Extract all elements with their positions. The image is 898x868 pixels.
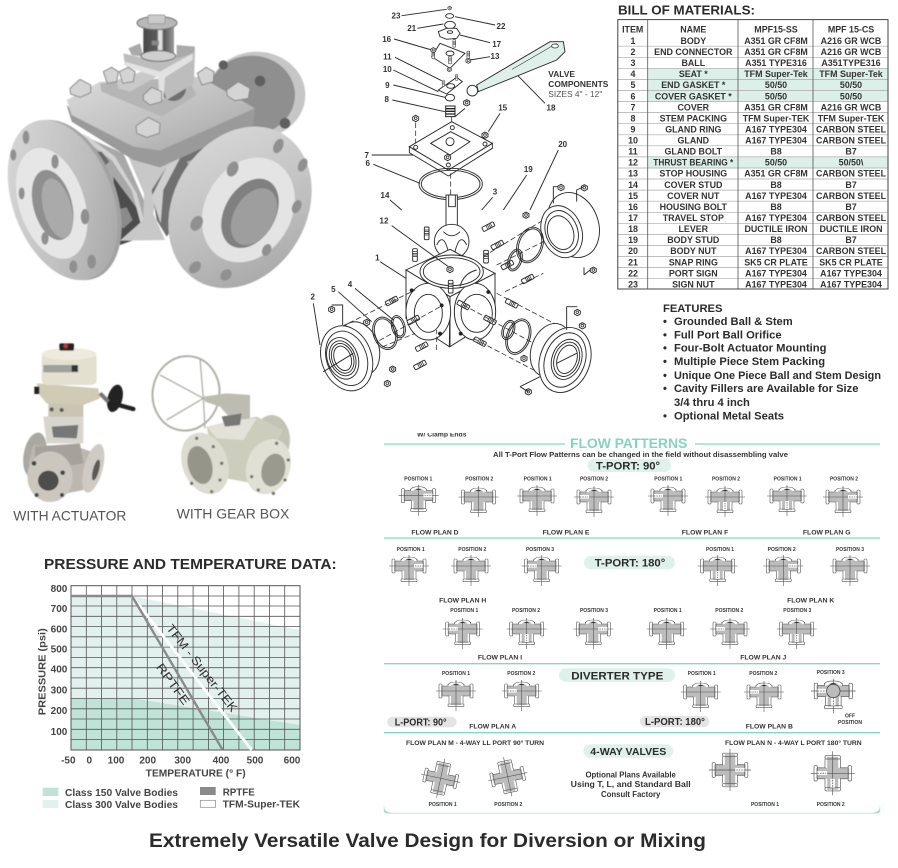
table rows: 18 [628, 224, 638, 234]
table rows: END GASKET * [661, 80, 726, 90]
legend: TFM-Super-TEK [223, 800, 300, 811]
table rows: CARBON STEEL [816, 169, 887, 179]
table rows: B8 [770, 235, 782, 245]
position labels row 1: POSITION 2 [830, 476, 858, 482]
position labels row 2: POSITION 2 [768, 547, 796, 553]
position labels row 1: POSITION 1 [524, 476, 552, 482]
table rows: A351 GR CF8M [744, 36, 808, 46]
table rows: A167 TYPE304 [745, 279, 807, 289]
position labels row 3: POSITION 2 [715, 608, 744, 614]
table rows: BODY [680, 36, 706, 46]
area: class 300 valve bodies [71, 596, 300, 750]
text block: features list: Optional Metal Seats [674, 410, 784, 422]
table rows [628, 36, 887, 289]
rear right flange [534, 185, 608, 265]
part number callouts: 12 [380, 216, 389, 226]
part number callouts: 4 [348, 280, 353, 289]
position labels 4-way: POSITION 2 [817, 802, 845, 808]
label: off position: POSITION [838, 720, 862, 726]
table rows: B8 [770, 180, 782, 190]
table rows: DUCTILE IRON [744, 224, 808, 234]
table rows: 12 [628, 158, 638, 168]
table rows: A351TYPE316 [821, 58, 881, 68]
position labels row 3: POSITION 1 [450, 608, 479, 614]
text block: features list: • [663, 356, 667, 368]
table rows: SIGN NUT [672, 279, 715, 289]
table rows: A216 GR WCB [821, 102, 881, 112]
x axis labels: 100 [108, 756, 125, 767]
position labels row 1: POSITION 1 [654, 476, 683, 482]
part number callouts: 8 [384, 95, 389, 104]
back flange [208, 52, 305, 138]
stem knob and collar [137, 15, 177, 61]
caption: with gear box: WITH GEAR BOX [177, 506, 289, 522]
table rows: SNAP RING [669, 257, 718, 267]
part number callouts: 5 [331, 285, 336, 294]
table rows: CARBON STEEL [816, 246, 887, 256]
table rows: 4 [631, 69, 636, 79]
table rows: THRUST BEARING * [653, 158, 734, 168]
text block: features list [663, 303, 881, 422]
position labels diverter: POSITION 1 [688, 671, 716, 677]
table rows: END CONNECTOR [654, 47, 733, 57]
heading: bill of materials: BILL OF MATERIALS: [618, 2, 755, 18]
table rows: LEVER [679, 224, 709, 234]
table rows: COVER [678, 102, 710, 112]
text block: features list: Cavity Fillers are Available for Size [674, 383, 858, 395]
centre body [120, 157, 173, 241]
left pipe and bolts [63, 127, 147, 245]
lever handle [467, 42, 565, 96]
part number callouts: 6 [365, 159, 370, 168]
text block: optional plans: Using T, L, and Standard Ball [571, 780, 691, 789]
position labels row 1: POSITION 1 [404, 476, 433, 482]
table rows: 1 [631, 36, 636, 46]
table rows: PORT SIGN [669, 268, 718, 278]
table rows: CARBON STEEL [816, 213, 887, 223]
position labels row 1: POSITION 2 [580, 476, 608, 482]
position labels diverter: POSITION 2 [749, 671, 778, 677]
position labels row 1: POSITION 1 [774, 476, 802, 482]
x axis labels: 0 [87, 756, 93, 767]
position labels diverter: POSITION 2 [507, 671, 536, 677]
table rows: A351 GR CF8M [744, 47, 808, 57]
line label: RPTFE: RPTFE [153, 661, 193, 708]
table rows: 50/50 [840, 80, 862, 90]
table rows: A167 TYPE304 [745, 213, 807, 223]
table rows: CARBON STEEL [816, 136, 887, 146]
part number callouts: 23 [392, 12, 401, 20]
table rows: GLAND [678, 136, 710, 146]
part number callouts: 15 [498, 104, 508, 112]
photo: main three-way ball valve [0, 15, 340, 314]
right pipe [152, 142, 217, 237]
table rows: 10 [628, 136, 638, 146]
part number callouts: 3 [493, 188, 498, 196]
position labels row 2: POSITION 1 [706, 547, 734, 553]
table rows: 50/50 [840, 91, 862, 101]
table rows: 11 [628, 147, 638, 157]
right flange [140, 100, 340, 314]
front right flange [523, 318, 600, 400]
part number callouts: 11 [383, 52, 392, 62]
table rows: 23 [628, 279, 638, 289]
table rows: B7 [845, 235, 857, 245]
table rows: A167 TYPE304 [745, 246, 807, 256]
x axis labels: 600 [284, 756, 301, 767]
part number callouts: 19 [524, 165, 533, 174]
flow plan labels row 1: FLOW PLAN D [411, 530, 459, 536]
text block: features list: • [663, 370, 667, 382]
table rows: SK5 CR PLATE [819, 257, 883, 267]
text block: features list: • [663, 330, 667, 342]
pill: T-port 180: T-PORT: 180° [595, 558, 666, 570]
exploded diagram: valve components [310, 6, 608, 400]
left flange [0, 105, 142, 295]
table rows: A167 TYPE304 [745, 124, 807, 134]
table rows: A167 TYPE304 [820, 268, 882, 278]
table rows: 14 [628, 180, 638, 190]
pill: L-port 180: L-PORT: 180° [645, 717, 705, 728]
label: valve components: SIZES 4" - 12" [548, 90, 602, 99]
upper stem and cover assembly [372, 6, 565, 210]
photo: valve with actuator [20, 343, 133, 502]
position labels row 2: POSITION 3 [526, 547, 554, 553]
cube body [406, 249, 496, 347]
part number callouts: 14 [381, 191, 390, 200]
part number callouts: 9 [385, 81, 390, 90]
table rows: 19 [628, 235, 638, 245]
table rows: 5 [631, 80, 636, 90]
x axis labels: 400 [213, 756, 230, 767]
x axis labels: 300 [174, 756, 191, 767]
position labels diverter: POSITION 3 [817, 670, 845, 676]
table rows: COVER GASKET * [655, 91, 732, 101]
heading: pressure and temperature: PRESSURE AND TEMPERATURE DATA: [44, 556, 337, 573]
table rows: 6 [631, 91, 636, 101]
table rows: 50/50\ [839, 158, 864, 168]
table rows: A216 GR WCB [821, 36, 881, 46]
part number callouts: 16 [382, 35, 392, 44]
position labels 4-way: POSITION 1 [751, 802, 779, 808]
part number callouts: 2 [310, 292, 315, 302]
table rows: 15 [628, 191, 638, 201]
flow plan labels row 1: FLOW PLAN F [682, 530, 728, 536]
flow plan labels row 1: FLOW PLAN G [803, 530, 850, 536]
text block: features list: • [663, 410, 667, 422]
panel bottom border [384, 806, 880, 814]
table rows: BALL [681, 58, 706, 68]
pill: diverter type: DIVERTER TYPE [571, 670, 663, 682]
table rows: CARBON STEEL [816, 124, 887, 134]
label: off position: OFF [845, 714, 855, 720]
table rows: COVER STUD [664, 180, 723, 190]
chart: pressure vs temperature [38, 584, 301, 779]
group: 4-way valves [406, 740, 862, 808]
flow plan B: FLOW PLAN B [746, 723, 793, 730]
pill: 4-way valves [583, 744, 673, 758]
table rows: GLAND BOLT [665, 147, 723, 157]
part number callouts [310, 12, 568, 302]
position labels row 3: POSITION 3 [580, 608, 608, 614]
table rows: BODY NUT [670, 246, 717, 256]
icons: flow plans D E F G [398, 485, 863, 517]
table rows: TFM Super-Tek [819, 69, 883, 79]
table rows: B7 [845, 180, 857, 190]
section rules [384, 444, 880, 733]
position labels row 2: POSITION 1 [397, 547, 425, 553]
y axis labels: 300 [51, 686, 68, 696]
icons: flow plans H K [389, 555, 870, 586]
table rows: STOP HOUSING [659, 169, 727, 179]
icons: diverter L-port [436, 679, 856, 713]
nuts [329, 184, 596, 395]
table rows: A351 GR CF8M [744, 102, 808, 112]
text block: features list: Unique One Piece Ball and Stem Design [674, 370, 881, 382]
photo: valve with gear box [147, 351, 298, 501]
pill: T-port 180 [584, 556, 675, 570]
text block: optional plans: Consult Factory [601, 790, 661, 799]
flow plan labels I J: FLOW PLAN J [740, 655, 787, 662]
position labels row 3: POSITION 3 [783, 608, 812, 614]
table rows: 16 [628, 202, 638, 212]
position labels 4-way: POSITION 2 [494, 802, 523, 808]
table rows: STEM PACKING [660, 113, 727, 123]
text block: features list: • [663, 383, 667, 395]
label: valve components: VALVE [548, 69, 575, 79]
table rows: A167 TYPE304 [745, 136, 807, 146]
x axis title: TEMPERATURE (° F) [146, 768, 246, 779]
table rows: 2 [631, 47, 636, 57]
text block: features list: 3/4 thru 4 inch [674, 397, 750, 409]
position labels row 3: POSITION 2 [512, 608, 540, 614]
table rows: 20 [628, 246, 638, 256]
table rows: A167 TYPE304 [745, 268, 807, 278]
y axis labels: 600 [51, 624, 68, 636]
table rows: 17 [628, 213, 638, 223]
y axis labels: 800 [51, 584, 68, 595]
icons: flow plans I J [443, 618, 817, 649]
left flange [312, 316, 387, 398]
table rows: 50/50 [765, 91, 787, 101]
text block: features list: Multiple Piece Stem Packing [674, 356, 825, 368]
exploded axis lines [323, 220, 577, 373]
text block: features list: FEATURES [663, 303, 723, 315]
text block: optional plans: Optional Plans Available [585, 771, 677, 780]
position labels row 2 [397, 547, 864, 553]
pill: diverter type [559, 668, 675, 682]
table rows: 9 [631, 124, 636, 134]
part number callouts: 21 [407, 24, 417, 33]
valve ball and stem [434, 195, 469, 259]
heading: flow patterns: FLOW PATTERNS [570, 435, 687, 451]
line: TFM-Super-TEK limit [132, 596, 252, 750]
table header: ITEM [622, 25, 643, 35]
table rows: BODY STUD [667, 235, 720, 245]
pill: L-port 90: L-PORT: 90° [395, 718, 447, 729]
position labels 4-way: POSITION 1 [429, 802, 457, 808]
table rows: 3 [631, 58, 636, 68]
table rows: TFM Super-TEK [743, 113, 810, 123]
text block: features list: Four-Bolt Actuator Mounting [674, 342, 827, 354]
text block: features list: • [663, 342, 667, 354]
area: class 150 valve bodies [71, 698, 300, 750]
table rows: 8 [631, 113, 636, 123]
legend: Class 150 Valve Bodies [65, 788, 179, 799]
position labels row 2: POSITION 2 [458, 547, 487, 553]
part number callouts: 10 [383, 65, 392, 74]
position labels row 2: POSITION 3 [836, 547, 864, 553]
label: valve components: COMPONENTS [548, 79, 609, 89]
part number callouts: 18 [547, 104, 556, 112]
table rows: 50/50 [765, 80, 787, 90]
main caption: Extremely Versatile Valve Design for Diversion or Mixing [149, 831, 706, 852]
flow plan labels H K: FLOW PLAN K [787, 597, 834, 604]
table rows: A351 GR CF8M [744, 169, 808, 179]
x axis labels [61, 756, 301, 767]
flow plan labels row 1 [411, 530, 850, 536]
table rows: CARBON STEEL [816, 191, 887, 201]
legend [43, 787, 300, 811]
flow plan N: FLOW PLAN N - 4-WAY L PORT 180° TURN [725, 740, 862, 747]
position labels row 1 [404, 476, 858, 482]
position labels row 1: POSITION 2 [712, 476, 740, 482]
panel: pressure and temperature data [38, 556, 337, 811]
x axis labels: 500 [247, 756, 264, 767]
table rows: COVER NUT [667, 191, 720, 201]
y axis title: PRESSURE (psi) [38, 628, 48, 715]
table rows: A351 TYPE316 [745, 58, 807, 68]
cover plate [409, 122, 492, 176]
table rows: HOUSING BOLT [660, 202, 728, 212]
part number callouts: 20 [558, 140, 568, 149]
y axis labels: 700 [51, 604, 68, 615]
table rows: 50/50 [765, 158, 787, 168]
y axis labels: 500 [51, 644, 68, 656]
text block: optional plans [571, 771, 691, 799]
text block: features list: Grounded Ball & Stem [674, 316, 793, 328]
text block: features list: Full Port Ball Orifice [674, 330, 782, 342]
table: bill of materials [618, 20, 888, 289]
pill: T-port 90 [588, 459, 671, 473]
flow plan A: FLOW PLAN A [469, 723, 516, 730]
legend: Class 300 Valve Bodies [65, 800, 179, 811]
flow plan M: FLOW PLAN M - 4-WAY LL PORT 90° TURN [406, 740, 545, 747]
table rows: DUCTILE IRON [819, 224, 883, 234]
table rows: B8 [770, 147, 782, 157]
top cover plate with bolts and yoke [67, 43, 255, 167]
x axis labels: -50 [61, 756, 76, 767]
table rows: 7 [631, 102, 636, 112]
flow plan labels I J: FLOW PLAN I [478, 655, 522, 662]
flow plan labels I J [478, 655, 787, 662]
panel: flow patterns [384, 432, 880, 814]
table rows: 22 [628, 268, 638, 278]
table rows: TRAVEL STOP [663, 213, 724, 223]
legend: RPTFE [223, 788, 255, 798]
group: T-port 90 [398, 459, 863, 536]
table rows: B8 [770, 202, 782, 212]
subheading: All T-Port Flow Patterns can be changed in the field without disassembling valve [493, 450, 788, 459]
table header: MPF15-SS [754, 25, 798, 35]
line: RPTFE limit [71, 596, 223, 750]
part number callouts: 1 [375, 254, 380, 262]
table rows: GLAND RING [665, 124, 721, 134]
position labels 4-way [429, 802, 845, 808]
y axis labels [51, 584, 68, 738]
flow plan labels row 1: FLOW PLAN E [543, 530, 590, 536]
y axis labels: 100 [51, 727, 68, 738]
clipped text fragment: W/ Clamp Ends [417, 432, 467, 438]
table rows: 21 [628, 257, 638, 267]
position labels diverter: POSITION 1 [442, 671, 470, 677]
table rows: B7 [845, 202, 857, 212]
table header: MPF 15-CS [828, 25, 874, 35]
label: off position [838, 714, 862, 726]
table rows: SK5 CR PLATE [744, 257, 808, 267]
flow plan labels H K: FLOW PLAN H [439, 597, 486, 604]
position labels row 1: POSITION 2 [465, 476, 494, 482]
position labels row 3 [450, 608, 812, 614]
body, ball and flanges [312, 184, 608, 400]
table rows: A167 TYPE304 [745, 191, 807, 201]
x axis labels: 200 [139, 756, 156, 767]
y axis labels: 400 [51, 664, 68, 676]
part number callouts: 17 [492, 40, 502, 49]
table rows: TFM Super-TEK [818, 113, 885, 123]
table rows: A167 TYPE304 [820, 279, 882, 289]
pill: T-port 90: T-PORT: 90° [596, 461, 661, 473]
label: valve components [548, 69, 609, 99]
position labels row 3: POSITION 1 [654, 608, 682, 614]
table rows: B7 [845, 147, 857, 157]
group: T-port 180 [389, 547, 870, 662]
icons: 4-way valves [417, 749, 855, 802]
table rows: SEAT * [679, 69, 708, 79]
o-rings and gaskets [368, 223, 548, 358]
text block: features list: • [663, 316, 667, 328]
table rows: A216 GR WCB [821, 47, 881, 57]
table header [622, 25, 874, 35]
table rows: TFM Super-Tek [744, 69, 808, 79]
part number callouts: 7 [364, 151, 369, 160]
y axis labels: 200 [51, 706, 68, 717]
flow plan labels H K [439, 597, 834, 604]
position labels diverter [442, 670, 845, 677]
group: diverter type [387, 668, 862, 730]
table header: NAME [680, 25, 706, 35]
line label: TFM Super-TEK: TFM - Super-TEK [163, 622, 240, 715]
table rows: 13 [628, 169, 638, 179]
caption: with actuator: WITH ACTUATOR [13, 508, 126, 524]
part number callouts: 13 [491, 52, 500, 61]
pill: 4-way valves: 4-WAY VALVES [590, 747, 666, 758]
part number callouts: 22 [497, 22, 506, 31]
